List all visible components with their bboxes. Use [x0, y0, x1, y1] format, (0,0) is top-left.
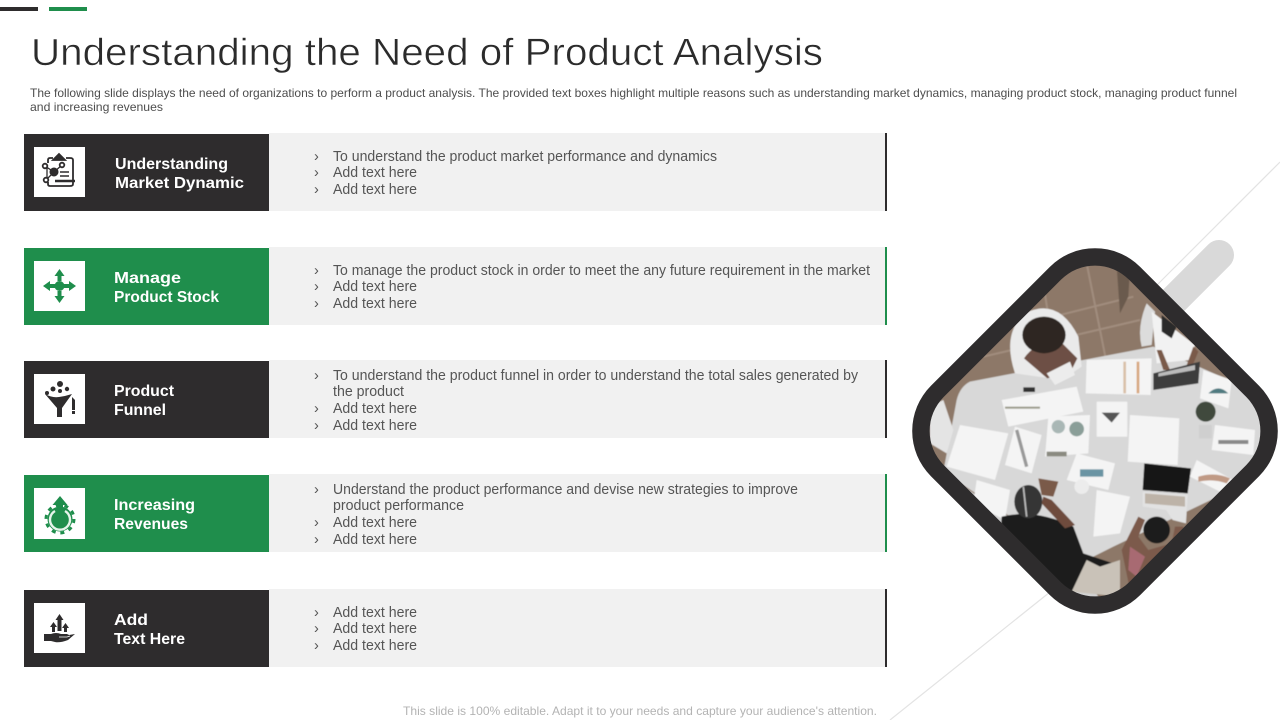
panel: increasing revenues: ›: [314, 482, 319, 498]
panel: product funnel: the product: [333, 384, 404, 400]
icon: funnel: [45, 381, 75, 417]
panel: product funnel: Funnel: [114, 402, 166, 419]
panel: add text here: ›: [314, 638, 319, 654]
person top right with laptop: [1140, 303, 1200, 390]
laptop bottom right: [1143, 463, 1191, 523]
panel: understanding market dynamic: Market Dynamic: [115, 175, 244, 192]
panel: product funnel: Add text here: [333, 418, 417, 434]
icon: hand with up arrows: [44, 614, 75, 642]
panel: increasing revenues: Increasing: [114, 497, 195, 514]
panel: understanding market dynamic: ›: [314, 182, 319, 198]
icon: gear with up arrow: [46, 496, 74, 533]
panel: manage product stock: Add text here: [333, 279, 417, 295]
panel: product funnel: ›: [314, 368, 319, 384]
panel: add text here: Text Here: [114, 631, 185, 648]
subtitle: and increasing revenues: [30, 100, 163, 114]
diamond photo frame: [886, 222, 1280, 640]
panel: increasing revenues: ›: [314, 515, 319, 531]
subtitle: [30, 86, 1237, 114]
panel: manage product stock: ›: [314, 279, 319, 295]
panel: manage product stock: Product Stock: [114, 289, 219, 306]
panel: add text here: Add text here: [333, 605, 417, 621]
panel: understanding market dynamic: ›: [314, 149, 319, 165]
panel: manage product stock: To manage the product stock in order to meet the any future requirement in the market: [333, 263, 870, 279]
panel: manage product stock: Manage: [114, 270, 181, 287]
subtitle: The following slide displays the need of organizations to perform a product analysis. The provided text boxes highlight multiple reasons such as understanding market dynamics, managing product stock, managing product funnel: [30, 86, 1237, 100]
small charts on papers: [1005, 362, 1248, 483]
panel: product funnel: [24, 360, 887, 438]
panel: understanding market dynamic: [24, 133, 887, 211]
panel: product funnel: To understand the product funnel in order to understand the total sales generated by: [333, 368, 859, 384]
panel: increasing revenues: ›: [314, 532, 319, 548]
panel: manage product stock: [24, 247, 887, 325]
panel: add text here: ›: [314, 605, 319, 621]
panel: manage product stock: ›: [314, 296, 319, 312]
panel: add text here: [24, 589, 887, 667]
panel: add text here: ›: [314, 621, 319, 637]
top accent marks: [0, 7, 87, 11]
panel: increasing revenues: product performance: [333, 498, 464, 514]
panel: understanding market dynamic: Add text here: [333, 182, 417, 198]
panel: increasing revenues: Revenues: [114, 516, 188, 533]
person bottom left dark: [1000, 478, 1112, 591]
panel: add text here: Add text here: [333, 621, 417, 637]
person bottom right: [1122, 516, 1184, 583]
panel: understanding market dynamic: Understanding: [115, 156, 228, 173]
icon: clipboard network: [43, 154, 75, 186]
panel: add text here: Add text here: [333, 638, 417, 654]
person left edge: [930, 400, 953, 453]
panel: product funnel: ›: [314, 418, 319, 434]
panel: understanding market dynamic: Add text here: [333, 165, 417, 181]
panel: increasing revenues: Add text here: [333, 532, 417, 548]
panel: manage product stock: ›: [314, 263, 319, 279]
panel: increasing revenues: Add text here: [333, 515, 417, 531]
floor bottom: [1072, 560, 1120, 597]
panel: add text here: Add: [114, 612, 148, 629]
title: Understanding the Need of Product Analysis: [31, 32, 823, 74]
panel: product funnel: ›: [314, 401, 319, 417]
person top left: [1010, 308, 1082, 385]
icon: four-way arrows: [43, 269, 76, 303]
panel: product funnel: Add text here: [333, 401, 417, 417]
photo: team meeting around table: [930, 266, 1260, 596]
panel: manage product stock: Add text here: [333, 296, 417, 312]
panel: understanding market dynamic: ›: [314, 165, 319, 181]
papers: [947, 358, 1255, 537]
panel: increasing revenues: Understand the product performance and devise new strategies to improve: [333, 482, 798, 498]
panel: increasing revenues: [24, 474, 887, 552]
decorative diagonal lines and grey pill: [890, 162, 1280, 720]
panel: understanding market dynamic: To understand the product market performance and dynamics: [333, 149, 717, 165]
plant: [1196, 402, 1216, 438]
panel: product funnel: Product: [114, 383, 175, 400]
footer note: This slide is 100% editable. Adapt it to your needs and capture your audience's attention.: [403, 704, 877, 718]
